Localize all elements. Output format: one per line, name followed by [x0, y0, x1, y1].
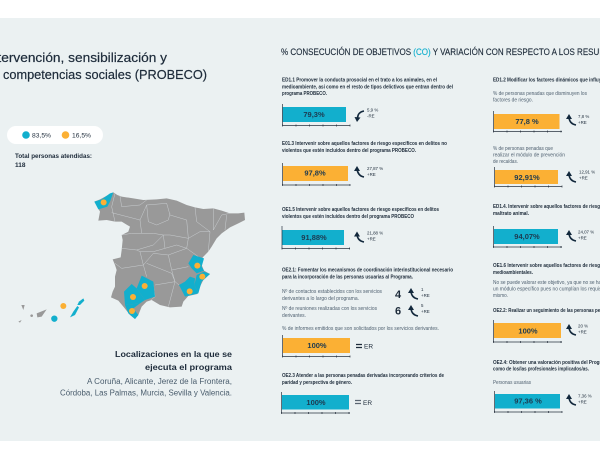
panel: OE2.1: derivantes.: [282, 313, 306, 319]
panel: ED1.2: 7,8 %: [578, 114, 589, 119]
panel: ED1.2: [493, 78, 600, 188]
panel: OE2.1: Nº de contactos establecidos con los servicios: [282, 289, 382, 295]
panel: OE2.2: 100%: [518, 326, 538, 336]
panel: OE2.1: Nº de reuniones realizadas con los servicios: [282, 306, 377, 312]
panel: OE1.5: 21,88 %: [367, 230, 383, 236]
panel: ED1.1: 79,3%: [303, 110, 325, 119]
panel: ED1.4: maltrato animal.: [493, 211, 529, 217]
province: Valencia: [188, 255, 204, 273]
panel: ED1.2: factores de riesgo.: [493, 98, 533, 104]
panel: ED1.1: 5,9 %: [367, 108, 378, 112]
panel: OE2.4: Personas usuarias: [493, 380, 531, 386]
panel: ED1.2: de recaídas.: [493, 159, 518, 165]
panel: ED1.1: programa PROBECO.: [282, 91, 327, 97]
panel: ED1.1: ED1.1 Promover la conducta prosocial en el trato a los animales, en el: [282, 78, 437, 84]
panel: OE1.5: +RE: [367, 236, 376, 242]
province: Córdoba: [137, 276, 155, 300]
panel: OE2.3: [282, 373, 444, 414]
locations text: ejecuta el programa: [145, 362, 232, 372]
panel: OE1.6: medioambientales.: [493, 270, 533, 276]
province: Sevilla: [124, 284, 145, 305]
panel: ED1.2: % de personas penadas que disminuyen los: [493, 91, 587, 97]
province: Alicante: [194, 272, 210, 293]
panel: ED1.2: +RE: [578, 120, 587, 125]
panel: ED1.3: violentos que estén incluidos dentro del programa PROBECO.: [282, 148, 416, 154]
panel: ED1.4: +RE: [578, 236, 587, 240]
panel: ED1.4: 24,07 %: [578, 230, 594, 234]
panel: ED1.2: 77,8 %: [515, 117, 539, 126]
locations text: Córdoba, Las Palmas, Murcia, Sevilla y Valencia.: [60, 388, 232, 398]
panel: ED1.3: E01.3 Intervenir sobre aquellos factores de riesgo específicos en delitos no: [282, 141, 448, 147]
locations text: [60, 349, 232, 398]
panel: OE2.4: 7,36 %: [578, 394, 592, 398]
panel: OE2.3: OE2.3 Atender a las personas penadas derivadas incorporando criterios de: [282, 373, 444, 379]
panel: OE1.5: OE1.5 Intervenir sobre aquellos factores de riesgo específicos en delitos: [282, 207, 439, 213]
panel: ED1.4: 94,07%: [514, 232, 540, 241]
location dots: [60, 199, 205, 314]
panel: OE2.1: ER: [364, 344, 373, 350]
province: A Coruña: [94, 192, 113, 209]
legend: 83,5%: [32, 132, 52, 140]
panel: OE1.5: violentos que estén incluidos dentro del programa PROBECO: [282, 214, 414, 220]
panel: OE2.1: % de informes emitidos que son solicitados por los servicios derivantes.: [282, 326, 439, 332]
panel: OE1.5: 91,88%: [301, 233, 327, 242]
title: competencias sociales (PROBECO): [3, 67, 207, 82]
panel: OE2.1: derivantes a lo largo del programa.: [282, 296, 359, 302]
panel: ED1.2: 12,91 %: [579, 170, 595, 174]
panel: OE2.4: [493, 360, 600, 413]
panel: ED1.1: medioambiente, así como en el resto de tipos delictivos que entran dentro del: [282, 84, 453, 90]
panel: OE2.3: 100%: [306, 398, 326, 407]
panel: ED1.3: 27,87 %: [367, 166, 383, 171]
Canary Islands: [18, 298, 84, 323]
panel: OE2.3: paridad y perspectiva de género.: [282, 380, 352, 386]
panel: OE2.1: [282, 268, 454, 358]
locations text: A Coruña, Alicante, Jerez de la Frontera,: [87, 377, 232, 386]
panel: ED1.2: % de personas penadas que: [493, 146, 553, 152]
legend: 16,5%: [72, 132, 92, 140]
panel: OE2.1: 4: [395, 289, 402, 301]
panel: OE1.5: [282, 207, 439, 250]
panel: OE2.1: OE2.1: Fomentar los mecanismos de coordinación interinstitucional necesario: [282, 268, 454, 274]
panel: ED1.3: 97,8%: [304, 168, 326, 178]
panel: ED1.3: [282, 141, 448, 186]
panel: OE2.1: 5: [421, 303, 424, 308]
panel: OE1.6: [493, 263, 600, 299]
province: Murcia: [179, 277, 198, 297]
panel: OE1.6: mismo.: [493, 293, 508, 299]
panel: OE2.4: +RE: [578, 400, 587, 404]
panel: OE2.1: 6: [395, 306, 401, 318]
panel: OE2.1: para la incorporación de las personas usuarias al Programa.: [282, 274, 413, 280]
panel: OE2.1: +RE: [421, 309, 430, 314]
panel: ED1.1: -RE: [367, 114, 375, 118]
title: [0, 50, 207, 82]
legend: [7, 126, 103, 144]
total persons served: [15, 154, 92, 169]
panel: OE2.1: +RE: [421, 293, 430, 298]
panel: OE2.2: [493, 308, 600, 343]
panel: OE2.1: 100%: [307, 341, 327, 350]
panel: ED1.3: +RE: [367, 172, 376, 177]
panel: OE2.2: 20 %: [578, 324, 588, 328]
panel: OE2.3: ER: [363, 400, 372, 407]
panel: ED1.2: +RE: [579, 176, 588, 180]
panel: ED1.1: [282, 78, 453, 126]
province: Cádiz: [125, 303, 140, 319]
panel: ED1.4: [493, 204, 600, 248]
panel: OE2.2: +RE: [578, 330, 587, 334]
map of Spain: [18, 192, 245, 323]
panel: OE2.4: 97,36 %: [514, 396, 542, 406]
panel: OE2.1: 1: [421, 287, 424, 292]
total persons served: Total personas atendidas:: [15, 154, 92, 160]
panel: ED1.2: realizar el módulo de prevención: [493, 152, 565, 158]
total persons served: 118: [15, 162, 26, 169]
locations text: Localizaciones en la que se: [115, 349, 232, 359]
panel: ED1.2: 92,91%: [514, 173, 540, 182]
